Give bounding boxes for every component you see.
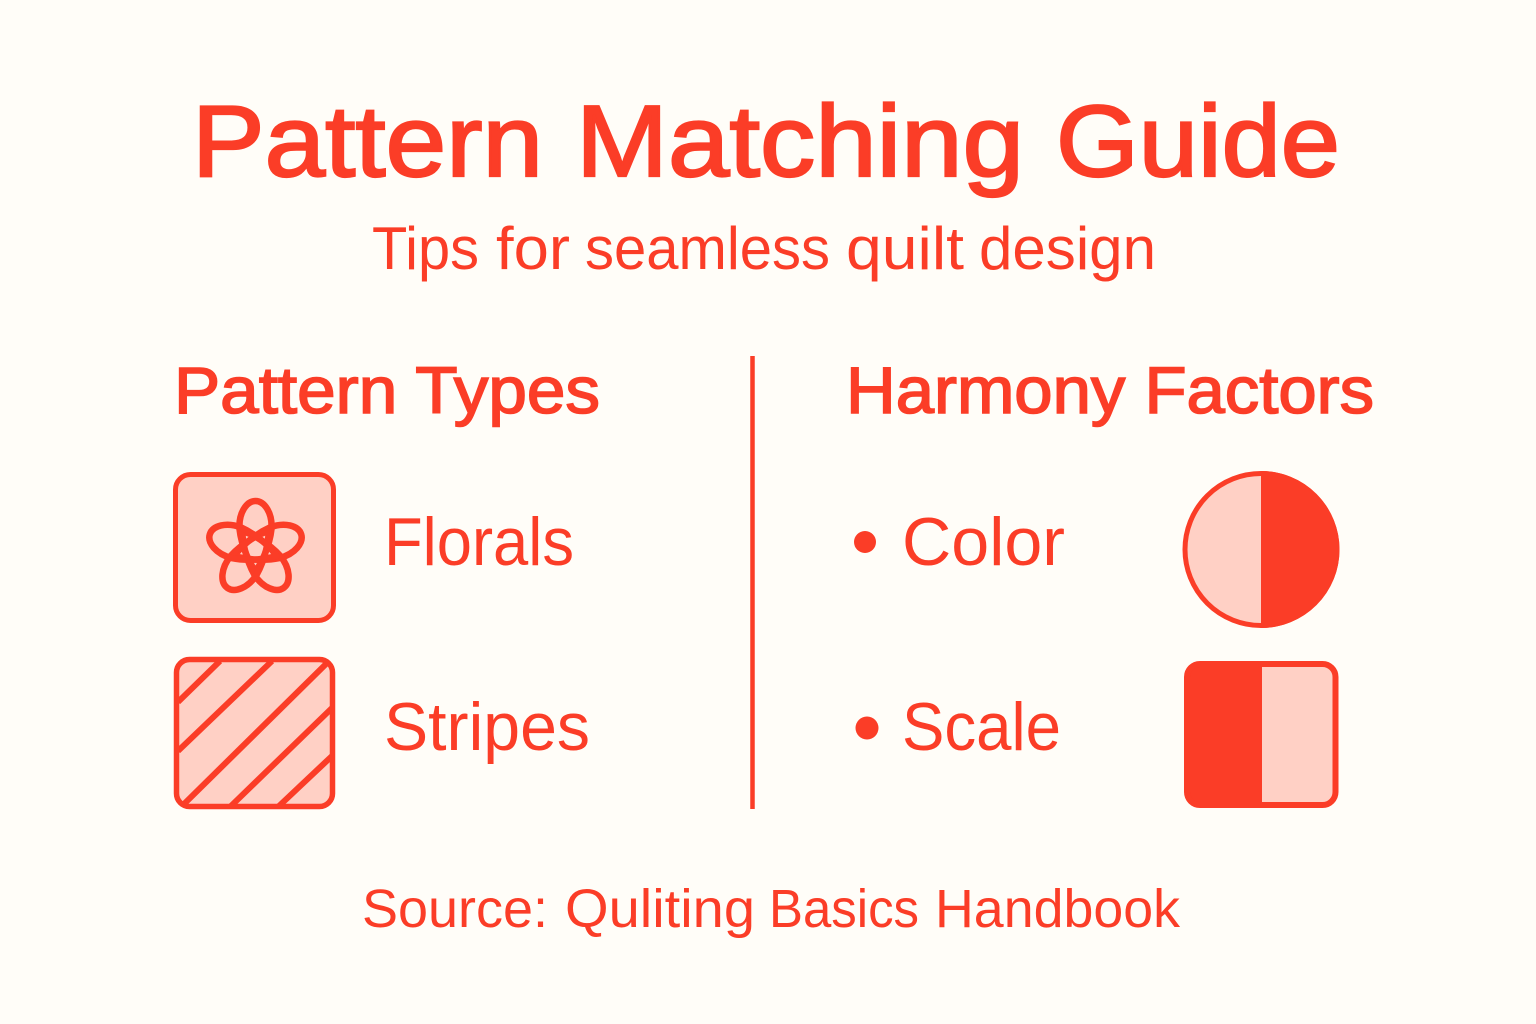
icon: half circle <box>1185 471 1340 628</box>
bullet: scale <box>856 716 878 740</box>
label: stripes: Stripes <box>384 689 590 765</box>
label: color: Color <box>902 504 1065 580</box>
bullet: color <box>854 531 876 553</box>
subtitle: quilt <box>846 215 964 282</box>
source: Handbook <box>935 879 1181 939</box>
subtitle: seamless <box>585 215 830 282</box>
source: Basics <box>769 879 919 939</box>
label: scale: Scale <box>902 689 1061 765</box>
subtitle: for <box>496 215 570 282</box>
label: florals: Florals <box>384 504 574 580</box>
subtitle: design <box>979 215 1156 282</box>
icon: stripes <box>176 660 332 806</box>
icon: half square <box>1185 662 1336 807</box>
heading: harmony factors: Harmony Factors <box>846 353 1374 427</box>
title: Guide <box>1056 86 1340 198</box>
subtitle: Tips <box>372 215 479 282</box>
source: Source: <box>362 879 548 939</box>
icon: florals <box>176 474 334 620</box>
source: Quliting <box>565 879 755 939</box>
center divider <box>750 356 755 809</box>
heading: pattern types: Pattern Types <box>174 353 600 427</box>
title: Matching <box>576 86 1024 198</box>
title: Pattern <box>192 86 543 198</box>
